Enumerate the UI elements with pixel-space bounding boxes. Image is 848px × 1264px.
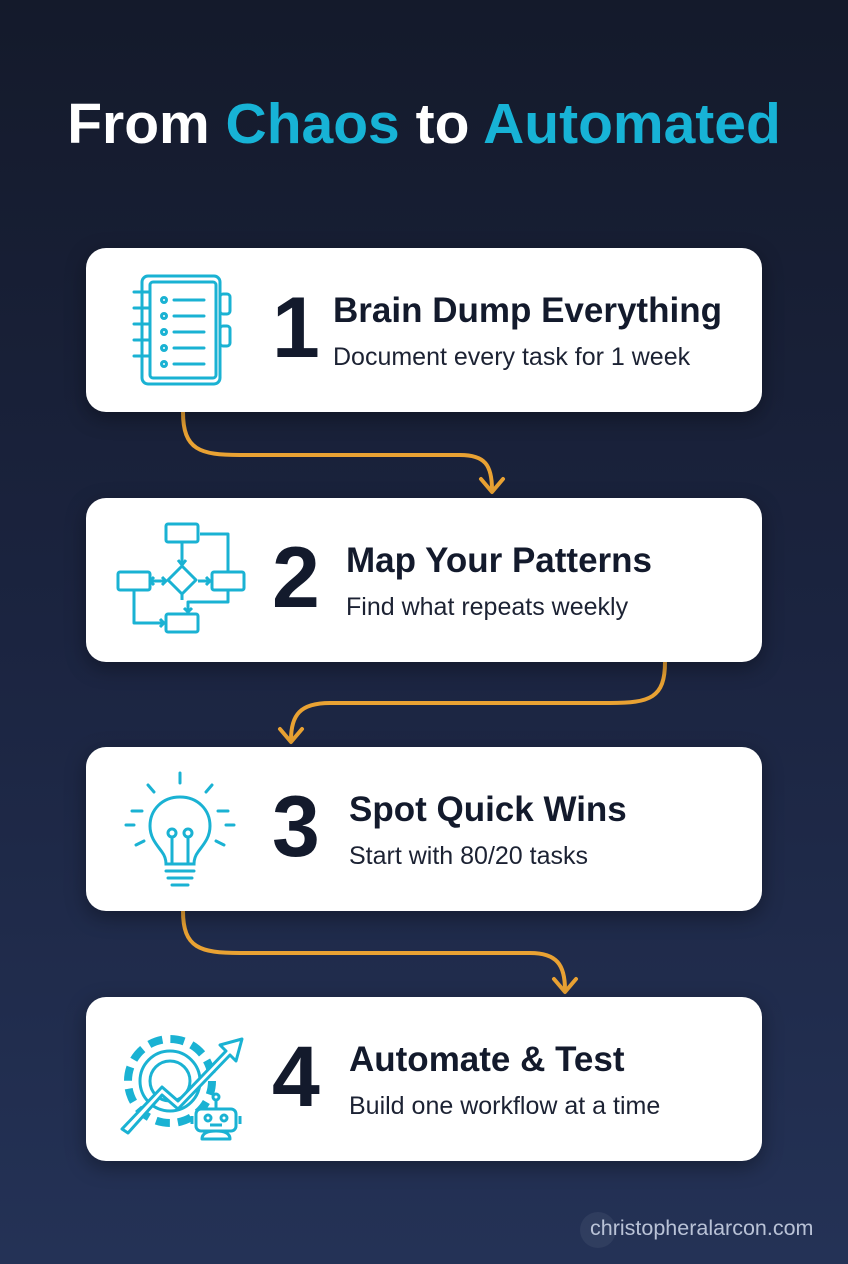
panel: step 2: [86, 498, 762, 662]
icon: notebook: [132, 274, 232, 386]
subtitle: Document every task for 1 week: [333, 343, 690, 371]
watermark: [580, 1212, 813, 1248]
panel: step 1: [86, 248, 762, 412]
icon: gear, arrow and robot: [120, 1035, 244, 1140]
number 2: 2: [272, 530, 320, 626]
heading: Automate & Test: [349, 1040, 624, 1079]
subtitle: Find what repeats weekly: [346, 593, 628, 621]
icon: light bulb: [124, 772, 236, 886]
number 3: 3: [272, 779, 320, 875]
text: christopheralarcon.com: [590, 1216, 813, 1240]
arrow: step 2 to 3: [280, 662, 665, 742]
arrow: step 3 to 4: [183, 911, 576, 992]
title: From Chaos to Automated: [67, 92, 781, 156]
heading: Brain Dump Everything: [333, 291, 722, 330]
panel: step 4: [86, 997, 762, 1161]
arrow: step 1 to 2: [183, 412, 503, 492]
number 4: 4: [272, 1029, 320, 1125]
number 1: 1: [272, 280, 320, 376]
subtitle: Start with 80/20 tasks: [349, 842, 588, 870]
icon: flowchart: [116, 522, 246, 634]
heading: Map Your Patterns: [346, 541, 652, 580]
subtitle: Build one workflow at a time: [349, 1092, 660, 1120]
heading: Spot Quick Wins: [349, 790, 627, 829]
panel: step 3: [86, 747, 762, 911]
